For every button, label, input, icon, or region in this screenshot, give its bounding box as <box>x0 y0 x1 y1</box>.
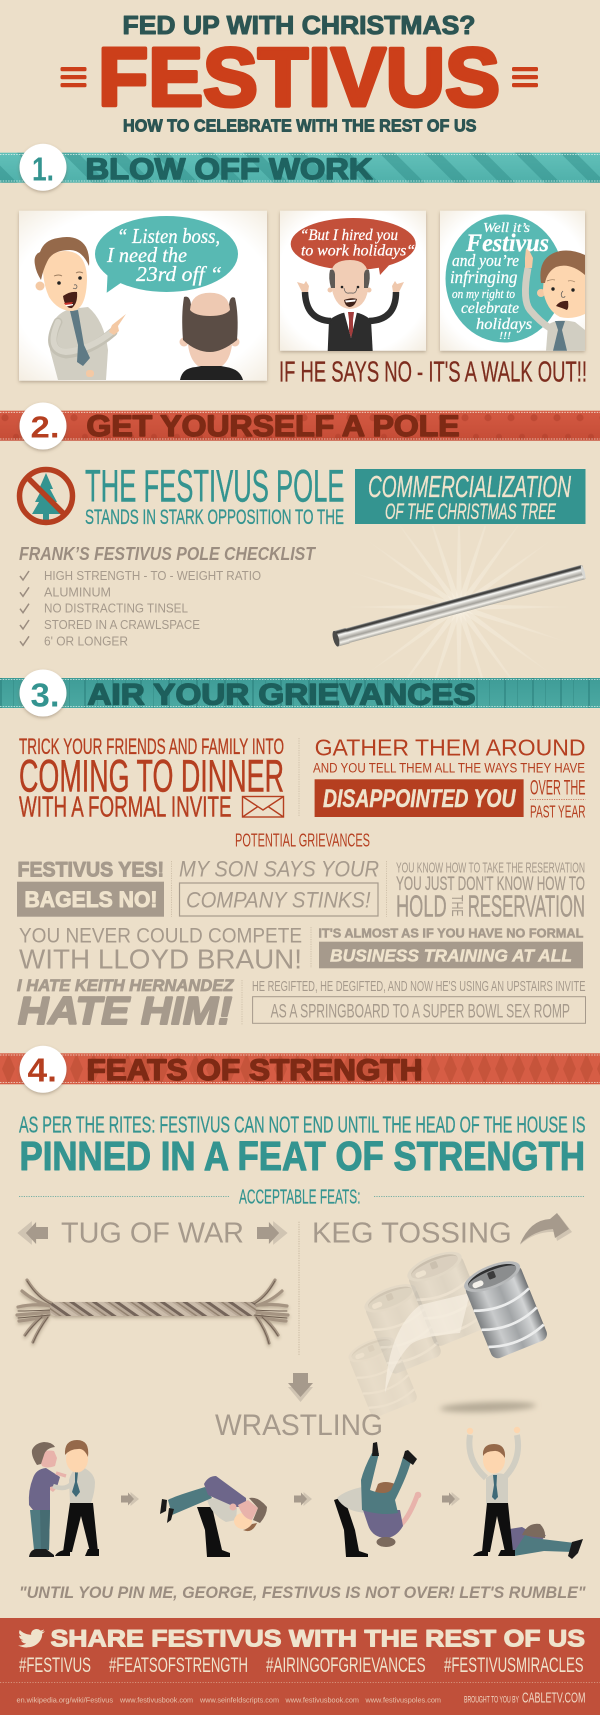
arrow: down <box>288 1373 313 1402</box>
footer <box>0 1618 600 1715</box>
grievance: lloyd braun: YOU NEVER COULD COMPETE <box>19 924 302 948</box>
grievance: hold the reservation: THE <box>448 895 465 916</box>
character: boss with arms up <box>297 260 404 351</box>
illustration: keg toss <box>345 1246 549 1419</box>
sources: en.wikipedia.org/wiki/Festivus <box>16 1696 113 1704</box>
heading: tug of war <box>17 1217 288 1249</box>
speech bubble: well it's festivus: celebrate <box>461 300 519 317</box>
speech bubble: but i hired you: to work holidays“ <box>301 242 415 260</box>
heading: air your grievances: AIR YOUR GRIEVANCES <box>88 678 476 712</box>
callout: commercialization <box>355 469 586 524</box>
grievance: company stinks: COMPANY STINKS! <box>186 887 370 912</box>
grievance: hate keith hernandez: HATE HIM! <box>18 990 232 1033</box>
grievance: hate keith hernandez <box>17 976 234 1033</box>
character: employee shouting <box>35 237 126 380</box>
illustration: festivus pole <box>331 564 587 647</box>
icon: no christmas tree <box>20 470 72 522</box>
sources: www.seinfeldscripts.com <box>199 1696 279 1704</box>
subheading: acceptable feats: ACCEPTABLE FEATS: <box>239 1186 360 1208</box>
subheading: potential grievances: POTENTIAL GRIEVANCES <box>235 830 370 851</box>
speech bubble: listen boss <box>95 216 238 293</box>
section 3 banner <box>0 670 600 716</box>
text block: gather them around <box>313 735 586 821</box>
heading: feats of strength: FEATS OF STRENGTH <box>86 1054 422 1087</box>
text block: coming to dinner <box>19 734 284 824</box>
title: fed up with christmas: FED UP WITH CHRISTMAS? <box>122 12 475 40</box>
hashtags <box>19 1654 584 1677</box>
number badge 1 <box>20 144 66 191</box>
checklist: 6' OR LONGER <box>44 634 128 648</box>
speech bubble: but i hired you: “But I hired you <box>300 227 398 244</box>
number badge 3: 3. <box>30 677 60 714</box>
hashtags: #FESTIVUS <box>19 1654 91 1677</box>
checklist <box>19 544 317 648</box>
grievance: festivus yes bagels no: BAGELS NO! <box>24 887 158 912</box>
number badge 4: 4. <box>28 1052 57 1089</box>
grievance: hold the reservation: HOLD <box>396 889 447 924</box>
checklist: HIGH STRENGTH - TO - WEIGHT RATIO <box>44 569 261 583</box>
speech bubble: well it's festivus: holidays <box>476 316 532 333</box>
grievance: hate keith hernandez: I HATE KEITH HERNANDEZ <box>17 976 234 995</box>
callout: disappointed you <box>315 779 524 817</box>
wrestling step 1 <box>29 1440 99 1557</box>
icon: envelope <box>242 796 284 817</box>
speech bubble: listen boss: “ Listen boss, <box>117 224 220 248</box>
text block: coming to dinner: WITH A FORMAL INVITE <box>19 792 231 824</box>
checklist heading: FRANK’S FESTIVUS POLE CHECKLIST <box>19 544 317 564</box>
speech bubble: well it's festivus: infringing <box>450 267 518 287</box>
quote: "UNTIL YOU PIN ME, GEORGE, FESTIVUS IS NOT OVER! LET'S RUMBLE" <box>19 1584 586 1602</box>
checklist: STORED IN A CRAWLSPACE <box>44 618 200 632</box>
speech bubble: well it's festivus: on my right to <box>452 287 515 301</box>
heading: the festivus pole: STANDS IN STARK OPPOSITION TO THE <box>85 506 344 529</box>
number badge 1: 1. <box>32 150 54 188</box>
wrestling step 4 <box>467 1427 583 1559</box>
title: festivus: FESTIVUS <box>98 30 500 124</box>
arrow: step 1 to 2 <box>121 1492 139 1506</box>
text block: gather them around: GATHER THEM AROUND <box>315 735 586 761</box>
wrestling step 3 <box>334 1442 421 1557</box>
heading: get yourself a pole: GET YOURSELF A POLE <box>86 410 460 443</box>
number badge 3 <box>20 670 66 716</box>
grievance: company stinks: MY SON SAYS YOUR <box>179 857 379 882</box>
section 2 banner <box>0 402 600 450</box>
grievance: lloyd braun: WITH LLOYD BRAUN! <box>19 943 302 974</box>
text block: coming to dinner: TRICK YOUR FRIENDS AND FAMILY INTO <box>19 734 284 759</box>
grievance: hold the reservation <box>396 859 585 924</box>
speech bubble: but i hired you <box>291 218 416 275</box>
callout: disappointed you: DISAPPOINTED YOU <box>323 785 516 813</box>
heading: wrastling: WRASTLING <box>215 1409 383 1442</box>
speech bubble: listen boss: I need the <box>106 243 187 267</box>
footer heading: SHARE FESTIVUS WITH THE REST OF US <box>50 1626 585 1653</box>
character: employee arm raised <box>525 248 585 351</box>
panel: boss refuses <box>280 211 426 351</box>
section 1 banner <box>0 144 600 191</box>
speech bubble: listen boss: 23rd off “ <box>136 262 222 286</box>
speech bubble: well it's festivus: Well it’s <box>483 221 531 236</box>
character: back of boss head <box>180 293 243 380</box>
speech bubble: well it's festivus: Festivus <box>465 230 549 257</box>
checklist: NO DISTRACTING TINSEL <box>44 602 188 616</box>
text block: as per the rites <box>19 1111 586 1179</box>
grievance: lloyd braun <box>19 924 302 974</box>
credit: BROUGHT TO YOU BY <box>464 1694 519 1704</box>
heading: the festivus pole: THE FESTIVUS POLE <box>85 461 344 512</box>
hashtags: #FEATSOFSTRENGTH <box>109 1654 248 1677</box>
sources: www.festivusbook.com <box>285 1696 359 1704</box>
icon: bird <box>18 1629 45 1647</box>
speech bubble: well it's festivus <box>446 214 564 342</box>
grievance: business training <box>318 926 584 968</box>
speech bubble: well it's festivus: !!! <box>499 331 511 342</box>
wrestling step 2 <box>160 1476 267 1557</box>
speech bubble: well it's festivus: and you’re <box>452 251 519 270</box>
burst behind pole <box>386 533 532 678</box>
panel: employee claims festivus <box>440 211 585 351</box>
sources: www.festivuspoles.com <box>365 1696 441 1704</box>
text block: coming to dinner: COMING TO DINNER <box>19 751 284 802</box>
heading: keg tossing: KEG TOSSING <box>312 1217 512 1249</box>
illustration: frayed rope <box>17 1280 288 1344</box>
heading: the festivus pole <box>85 461 344 529</box>
arrow: step 3 to 4 <box>442 1492 460 1506</box>
number badge 2 <box>20 402 66 450</box>
panel: employee asks boss <box>19 211 267 381</box>
grievance: business training: BUSINESS TRAINING AT ALL <box>330 946 572 966</box>
credit <box>464 1689 586 1706</box>
grievance: festivus yes bagels no <box>17 858 164 917</box>
subtitle: HOW TO CELEBRATE WITH THE REST OF US <box>123 115 476 135</box>
heading: tug of war: TUG OF WAR <box>61 1217 244 1249</box>
heading: keg tossing <box>312 1213 572 1249</box>
number badge 2: 2. <box>30 410 60 444</box>
grievance: company stinks <box>179 857 379 916</box>
section 4 banner <box>0 1046 600 1093</box>
arrow: step 2 to 3 <box>294 1492 312 1506</box>
grievance: festivus yes bagels no: FESTIVUS YES! <box>18 858 164 881</box>
heading: blow off work: BLOW OFF WORK <box>86 153 373 186</box>
grievance: super bowl <box>252 978 586 1023</box>
sources: www.festivusbook.com <box>119 1696 193 1704</box>
checklist: ALUMINUM <box>44 585 111 599</box>
number badge 4 <box>20 1046 66 1093</box>
hashtags: #AIRINGOFGRIEVANCES <box>266 1654 426 1677</box>
grievance: business training: IT'S ALMOST AS IF YOU HAVE NO FORMAL <box>318 926 584 940</box>
sources <box>16 1696 441 1704</box>
